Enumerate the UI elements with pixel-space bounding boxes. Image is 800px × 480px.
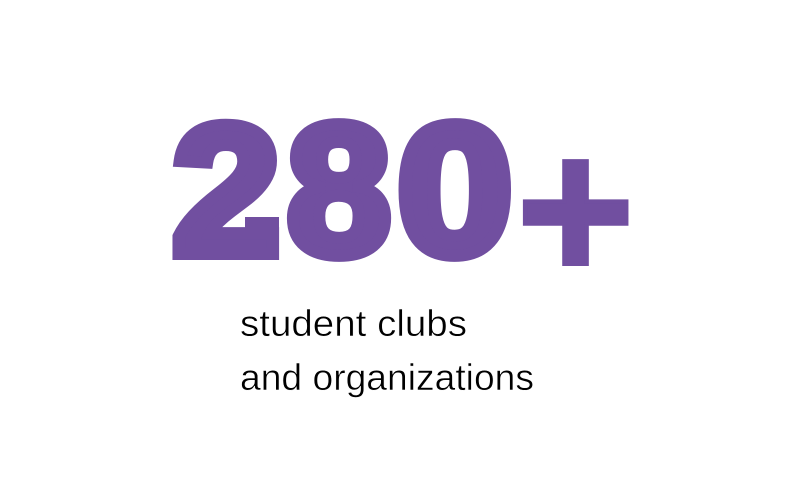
digit 0: 0 [397,85,513,294]
caption line 2: and organizations [240,357,534,398]
caption line 1: student clubs [240,303,467,344]
digit 8: 8 [287,86,391,294]
digit 2 foot serif [245,217,279,237]
caption: student clubs and organizations [240,303,534,398]
plus sign: + [517,97,634,323]
big number: 280+ [172,85,634,323]
digit 2: 2 [172,88,281,294]
